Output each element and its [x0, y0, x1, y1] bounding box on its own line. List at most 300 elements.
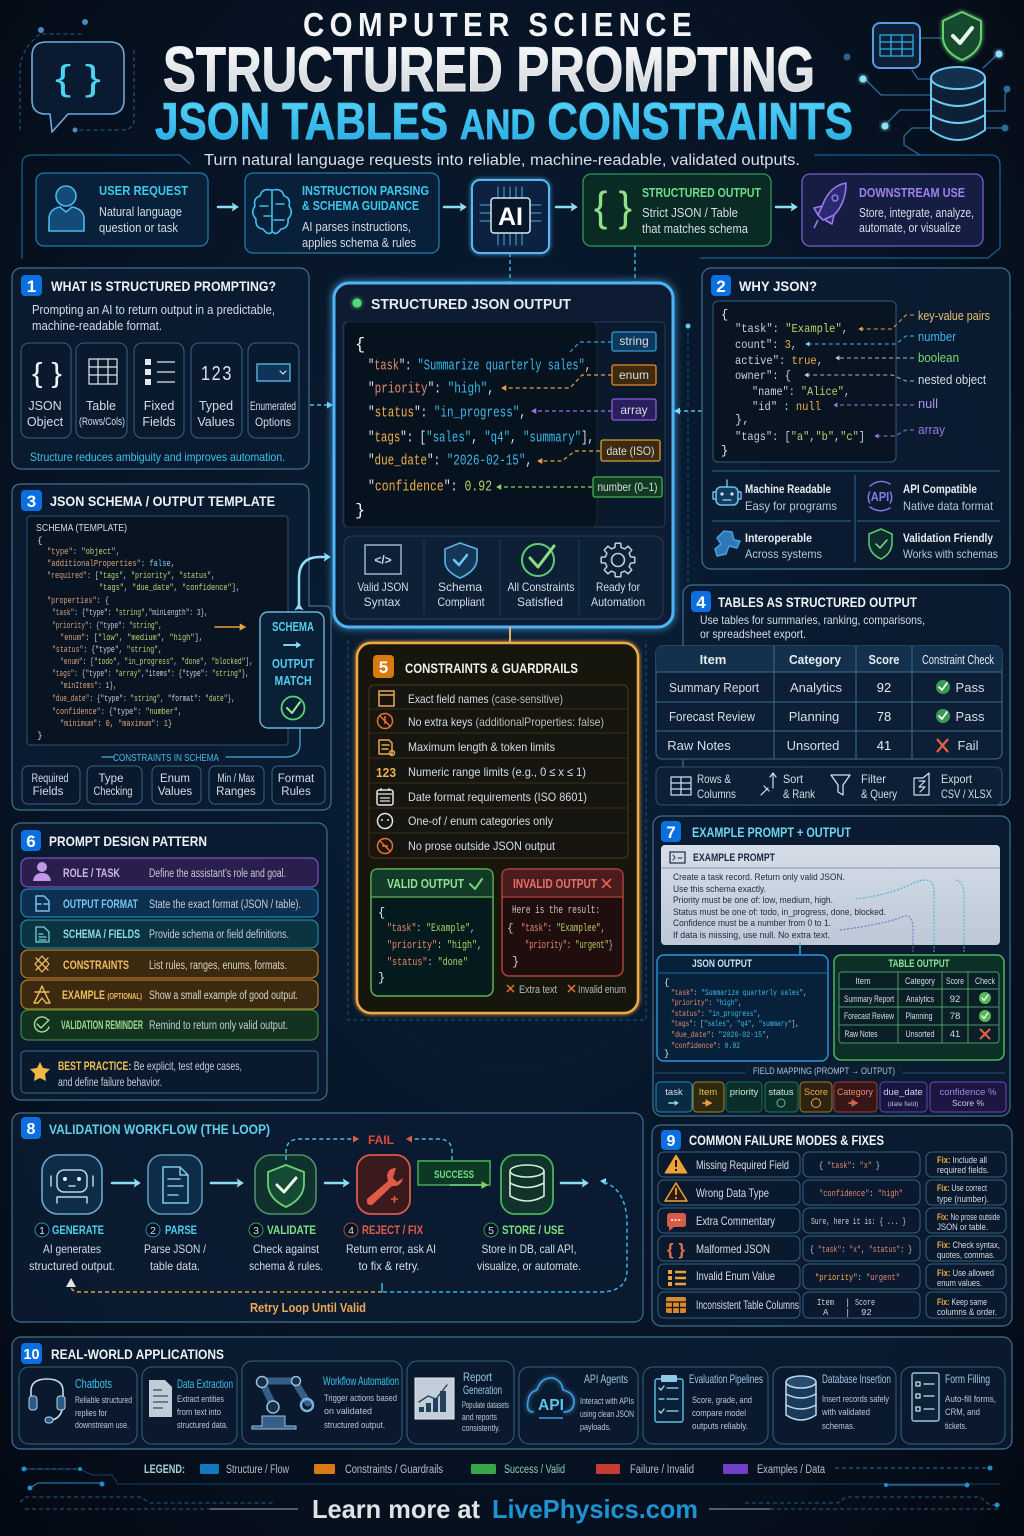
card: chatbots: Reliable structured	[75, 1395, 132, 1406]
example prompt card: Create a task record. Return only valid JSON.	[673, 872, 845, 883]
failure examples: { "task": "x", "status": }	[810, 1245, 912, 1255]
panel 1: what is structured prompting	[12, 268, 309, 469]
table output card: Unsorted	[906, 1029, 934, 1040]
step 4 reject fix: REJECT / FIX	[362, 1223, 423, 1237]
field mapping heading	[655, 1064, 1005, 1078]
connector: central to constraints	[509, 627, 511, 643]
panel 7: example prompt and output: 7	[666, 823, 676, 842]
JSON code: "task": "Summarize quarterly sales",	[368, 358, 591, 374]
footer: learn more	[312, 1494, 698, 1524]
arrow	[218, 206, 236, 208]
step 5 store use: STORE / USE	[502, 1223, 564, 1237]
panel 6: prompt design pattern: PROMPT DESIGN PATTERN	[49, 833, 207, 849]
schema code: "confidence": {"type": "number",	[52, 706, 182, 717]
card: data extraction: from text into	[177, 1407, 221, 1418]
failure examples: "priority": "urgent"	[815, 1273, 900, 1283]
panel 8: validation workflow	[12, 1113, 643, 1322]
panel: downstream use: automate, or visualize	[859, 221, 961, 235]
type tags and leaders: string	[619, 334, 649, 348]
JSON output card	[657, 955, 828, 1061]
panel 2: why JSON: WHY JSON?	[739, 278, 817, 294]
arrow: panel 1 to central	[310, 404, 332, 406]
panel 1: what is structured prompting: WHAT IS STRUCTURED PROMPTING?	[51, 278, 276, 294]
invalid reasons	[507, 984, 626, 996]
schema code: {	[37, 535, 43, 546]
constraint chips: Min / Max	[218, 773, 255, 785]
constraint chips: Ranges	[216, 786, 256, 798]
row backgrounds	[658, 1152, 1006, 1318]
schema output match box: OUTPUT	[272, 657, 314, 671]
row: example optional: EXAMPLE (OPTIONAL)	[62, 988, 142, 1002]
panel: structured output	[583, 174, 771, 246]
schema code: "enum": ["todo", "in_progress", "done", "blocked"],	[60, 656, 253, 667]
panel: instruction parsing: & SCHEMA GUIDANCE	[302, 198, 419, 213]
data table: 78	[877, 709, 891, 724]
invalid output: "task": "Examplee",	[521, 923, 605, 935]
failure fixes: Fix: Use allowed	[937, 1268, 994, 1279]
JSON code: {	[355, 336, 365, 355]
failure examples: 92	[861, 1308, 872, 1318]
panel 6: prompt design pattern	[12, 823, 327, 1100]
arrow	[776, 206, 795, 208]
card: report generation: Report	[463, 1370, 493, 1384]
retry loop: Retry Loop Until Valid	[250, 1300, 366, 1315]
panel 6: prompt design pattern: 6	[26, 832, 36, 851]
panel: central structured JSON output: STRUCTURED JSON OUTPUT	[371, 296, 571, 313]
constraint chips: Type	[99, 773, 123, 785]
type tags and leaders	[497, 332, 662, 497]
code sample: "id" : null	[752, 400, 821, 414]
JSON code: "priority": "high",	[368, 382, 494, 398]
status badges: Compliant	[438, 595, 485, 609]
schema code: }	[37, 730, 43, 741]
card: workflow automation	[242, 1361, 402, 1444]
data table: 41	[877, 738, 891, 753]
flow frame	[22, 155, 1000, 258]
panel: user request: Natural language	[99, 205, 182, 219]
feature: API compatible: (API)	[867, 489, 893, 504]
card: report generation: Generation	[463, 1383, 502, 1397]
card: table: (Rows/Cols)	[79, 416, 125, 428]
step 5 store use: visualize, or automate.	[477, 1259, 581, 1273]
step 1 generate: GENERATE	[52, 1223, 104, 1237]
annotations: nested object	[918, 373, 986, 387]
row: schema fields: Provide schema or field definitions.	[149, 929, 289, 941]
field mapping chips: Category	[837, 1087, 873, 1098]
field mapping chips	[656, 1082, 1006, 1112]
failure names	[696, 1158, 799, 1312]
title block: Turn natural language requests into reliable, machine-readable, validated outputs.	[204, 152, 800, 169]
card: data extraction: Extract entities	[177, 1394, 224, 1405]
feature: validation friendly: Validation Friendly	[903, 531, 993, 545]
panel: downstream use: Store, integrate, analyze,	[859, 206, 974, 220]
card: database insertion: with validated	[821, 1407, 870, 1418]
step 4 reject fix: Return error, ask AI	[346, 1242, 436, 1256]
status badges: Syntax	[364, 595, 400, 609]
schema code: "priority": {"type": "string",	[52, 620, 162, 631]
row: example optional	[21, 980, 318, 1009]
panel: structured output: that matches schema	[642, 222, 748, 236]
panel 4: tables as structured output: TABLES AS STRUCTURED OUTPUT	[718, 594, 917, 610]
panel 5: constraints and guardrails	[357, 643, 638, 1013]
step 5 store use: 5	[488, 1225, 494, 1237]
legend	[144, 1464, 825, 1476]
card: form filling	[901, 1367, 1005, 1444]
status badges: Schema	[438, 580, 482, 594]
data table: Unsorted	[787, 738, 839, 753]
data table: 92	[877, 680, 891, 695]
example prompt card: Confidence must be a number from 0 to 1.	[673, 918, 831, 929]
row: validation reminder: VALIDATION REMINDER	[61, 1018, 143, 1032]
JSON code: "tags": ["sales", "q4", "summary"],	[368, 430, 594, 446]
schema output match box: MATCH	[274, 674, 312, 688]
data table: Score	[868, 652, 900, 667]
example prompt card: Use this schema exactly.	[673, 884, 766, 895]
failure names: Malformed JSON	[696, 1242, 770, 1256]
table output card: TABLE OUTPUT	[888, 958, 950, 970]
step 4 reject fix: to fix & retry.	[358, 1259, 420, 1273]
row: constraints: CONSTRAINTS	[63, 958, 129, 972]
card: evaluation pipelines: Evaluation Pipelines	[689, 1372, 763, 1386]
type tags and leaders: date (ISO)	[606, 444, 654, 458]
schema code: SCHEMA (TEMPLATE)	[36, 522, 127, 534]
panel: instruction parsing: INSTRUCTION PARSING	[302, 183, 429, 198]
card: fixed fields: Fixed	[144, 399, 174, 413]
row: role task: Define the assistant's role and goal.	[149, 868, 286, 880]
failure examples: |	[845, 1308, 850, 1318]
card: table	[76, 343, 127, 438]
failure examples: "confidence": "high"	[819, 1189, 903, 1199]
failure fixes: required fields.	[937, 1165, 989, 1176]
constraint list: No extra keys (additionalProperties: false)	[408, 715, 604, 729]
constraint list: 123	[376, 765, 396, 780]
JSON code: "status": "in_progress",	[368, 406, 526, 422]
table output card: Item	[856, 976, 871, 987]
feature: machine readable	[713, 480, 837, 513]
type tags and leaders: array	[620, 403, 648, 417]
table output card: Summary Report	[844, 994, 894, 1005]
table output card: 78	[950, 1011, 960, 1022]
field mapping chips: (date field)	[888, 1101, 918, 1108]
footer: learn more: LivePhysics.com	[492, 1494, 698, 1524]
card: evaluation pipelines: compare model	[692, 1408, 746, 1419]
step 2 parse: 2	[150, 1225, 156, 1237]
row: constraints	[21, 950, 318, 978]
field mapping chips: due_date	[883, 1087, 923, 1098]
feature: API compatible: API Compatible	[903, 482, 977, 496]
JSON code: "confidence": 0.92	[368, 480, 492, 496]
failure fixes: Fix: Use correct	[937, 1183, 987, 1194]
schema code: "due_date": {"type": "string", "format": "date"},	[52, 693, 235, 704]
constraint chips: Fields	[33, 786, 64, 798]
schema code: "type": "object",	[47, 546, 120, 557]
invalid reasons: Extra text	[519, 984, 557, 996]
data table: Summary Report	[669, 680, 759, 695]
status badges: Automation	[591, 595, 645, 609]
valid output	[371, 869, 493, 996]
table output card: Raw Notes	[844, 1029, 878, 1040]
constraint list	[369, 685, 628, 858]
card: API agents: payloads.	[580, 1422, 611, 1433]
failure examples: A	[823, 1308, 829, 1318]
feature: interoperable: Across systems	[745, 547, 822, 561]
JSON output card: {	[664, 978, 669, 988]
schema code: "task": {"type": "string","minLength": 3},	[52, 607, 208, 618]
JSON code	[355, 336, 594, 521]
example prompt card: If data is missing, use null. No extra text.	[673, 930, 830, 941]
constraint chips	[22, 766, 325, 804]
legend: Constraints / Guardrails	[345, 1464, 443, 1476]
card: data extraction	[142, 1367, 237, 1444]
panel 3: JSON schema: JSON SCHEMA / OUTPUT TEMPLATE	[50, 493, 275, 509]
feature: validation friendly	[869, 529, 998, 561]
card: enumerated options: Enumerated	[250, 399, 296, 413]
card: form filling: CRM, and	[945, 1407, 980, 1418]
feature: API compatible	[867, 481, 994, 513]
table output card: Forecast Review	[844, 1011, 894, 1022]
table capabilities: & Query	[861, 787, 897, 801]
card: report generation	[407, 1361, 514, 1444]
step 1 generate: structured output.	[29, 1259, 115, 1273]
annotations: boolean	[918, 351, 959, 365]
arrow	[211, 1182, 241, 1184]
panel 5: constraints and guardrails: CONSTRAINTS & GUARDRAILS	[405, 660, 578, 676]
icon: table tile, shield and database	[844, 12, 1010, 155]
JSON output card: "status": "in_progress",	[671, 1009, 761, 1019]
JSON code: }	[355, 502, 365, 521]
schema code: "minItems": 1},	[60, 680, 117, 691]
constraint list: Numeric range limits (e.g., 0 ≤ x ≤ 1)	[408, 765, 586, 779]
card: database insertion: Insert records safely	[822, 1394, 889, 1405]
code sample: },	[735, 413, 749, 427]
AI chip	[472, 180, 549, 253]
failure fixes	[937, 1155, 1000, 1318]
data table	[656, 646, 1002, 759]
invalid output: INVALID OUTPUT	[513, 876, 597, 891]
row: output format: OUTPUT FORMAT	[63, 897, 138, 911]
legend: Success / Valid	[504, 1464, 565, 1476]
invalid output: {	[507, 923, 514, 935]
card: chatbots: downstream use.	[75, 1420, 129, 1431]
footer: learn more: Learn more at	[312, 1494, 480, 1524]
panel 9: common failure modes	[652, 1125, 1012, 1326]
legend: Examples / Data	[757, 1464, 825, 1476]
step 3 validate: 3	[253, 1225, 259, 1237]
schema code: "properties": {	[47, 595, 109, 606]
data table: Category	[789, 652, 842, 667]
card: API agents: API Agents	[584, 1372, 628, 1386]
card: JSON object	[21, 343, 71, 438]
step 1 generate	[29, 1155, 115, 1273]
row: output format: State the exact format (JSON / table).	[149, 899, 301, 911]
failure examples: Sure, here it is: { ... }	[811, 1217, 906, 1227]
card: report generation: Populate datasets	[462, 1400, 509, 1410]
panel: central structured JSON output	[334, 283, 673, 627]
step 2 parse	[144, 1155, 207, 1273]
failure fixes: enum values.	[937, 1278, 982, 1289]
data table: Pass	[956, 680, 985, 695]
type tags and leaders: number (0–1)	[598, 480, 658, 494]
retry loop	[66, 1178, 627, 1315]
card: enumerated options: Options	[255, 415, 291, 429]
callout: best practice: and define failure behavior.	[58, 1077, 162, 1089]
panel 3: JSON schema	[12, 484, 331, 810]
feature: API compatible: Native data format	[903, 499, 994, 513]
constraint chips: Checking	[94, 786, 132, 798]
card: typed values: 123	[201, 363, 233, 385]
schema code: "additionalProperties": false,	[47, 558, 175, 569]
panel 8: validation workflow: VALIDATION WORKFLOW (THE LOOP)	[49, 1122, 270, 1137]
panel 1: what is structured prompting: machine-readable format.	[32, 319, 162, 333]
legend: Failure / Invalid	[630, 1464, 694, 1476]
title block: COMPUTER SCIENCE	[303, 6, 697, 43]
constraint chips: Format	[278, 773, 315, 785]
failure names: Invalid Enum Value	[696, 1269, 775, 1283]
title block	[155, 6, 853, 169]
data table: Forecast Review	[669, 709, 756, 724]
failure fixes: Fix: Keep same	[937, 1297, 987, 1308]
field mapping chips: Score	[804, 1087, 828, 1098]
field mapping chips: confidence %	[939, 1087, 997, 1098]
data table: Item	[700, 652, 726, 667]
JSON output card: "priority": "high",	[671, 998, 742, 1008]
status badges: </>	[374, 553, 392, 567]
failure examples: Item	[817, 1298, 834, 1308]
panel 10: real-world applications: REAL-WORLD APPLICATIONS	[51, 1347, 224, 1362]
JSON output card: }	[664, 1049, 669, 1059]
data table: Pass	[956, 709, 985, 724]
status badges: Valid JSON	[358, 580, 408, 594]
field mapping chips: Item	[699, 1087, 717, 1098]
AI chip: AI	[498, 203, 523, 231]
data table: Fail	[958, 738, 979, 753]
annotations	[805, 309, 990, 437]
code sample: owner": {	[735, 369, 791, 383]
row: validation reminder: Remind to return only valid output.	[149, 1020, 288, 1032]
step 3 validate	[249, 1155, 323, 1273]
field mapping chips: task	[665, 1087, 683, 1098]
panel: instruction parsing: AI parses instructions,	[302, 220, 411, 234]
panel: user request	[36, 173, 208, 246]
annotations: number	[918, 330, 956, 344]
callout: best practice: BEST PRACTICE: Be explicit, test edge cases,	[58, 1059, 242, 1073]
schema code: "status": {"type", "string",	[52, 644, 162, 655]
constraint chips: Rules	[281, 786, 311, 798]
arrow	[556, 206, 575, 208]
panel 3: JSON schema: CONSTRAINTS IN SCHEMA	[113, 752, 219, 764]
card: report generation: consistently.	[462, 1423, 500, 1433]
arrow: panel 2 to central	[675, 410, 702, 412]
panel 4: tables as structured output: or spreadsheet export.	[700, 627, 806, 641]
panel: structured output: { }	[594, 183, 632, 230]
table capabilities: CSV / XLSX	[941, 787, 992, 801]
success and fail routing: FAIL	[368, 1133, 394, 1147]
step 2 parse: Parse JSON /	[144, 1242, 207, 1256]
card: JSON object: { }	[32, 357, 62, 388]
failure fixes: Fix: Check syntax,	[937, 1240, 1000, 1251]
panel 8: validation workflow: 8	[27, 1121, 36, 1138]
table capabilities	[656, 767, 1002, 805]
JSON output card: "confidence": 0.92	[671, 1041, 740, 1051]
annotations: key-value pairs	[918, 309, 990, 323]
table capabilities: Export	[941, 772, 973, 786]
card: typed values: Values	[197, 415, 235, 429]
callout: best practice	[21, 1051, 318, 1093]
table output card: Planning	[906, 1011, 932, 1022]
panel: downstream use: DOWNSTREAM USE	[859, 185, 965, 200]
card: form filling: Auto-fill forms,	[945, 1394, 996, 1405]
panel 1: what is structured prompting: Structure reduces ambiguity and improves automation.	[30, 450, 285, 464]
constraint chips: Required	[32, 773, 68, 785]
panel 4: tables as structured output: 4	[696, 593, 706, 612]
table output card: 41	[950, 1029, 960, 1040]
code sample: }	[721, 444, 728, 458]
table output card: Category	[905, 976, 935, 987]
schema code: "required": ["tags", "priority", "status",	[47, 570, 215, 581]
arrow	[112, 1182, 138, 1184]
step 4 reject fix: 4	[348, 1225, 354, 1237]
example prompt card	[661, 845, 1000, 952]
panel 7: example prompt and output: EXAMPLE PROMPT + OUTPUT	[692, 825, 852, 840]
legend: Structure / Flow	[226, 1464, 290, 1476]
row: example optional: Show a small example of good output.	[149, 990, 298, 1002]
title block: STRUCTURED PROMPTING	[163, 35, 815, 105]
code sample: "tags": ["a","b","c"]	[735, 430, 865, 444]
failure names: Missing Required Field	[696, 1158, 789, 1172]
panel 10: real-world applications: 10	[23, 1347, 40, 1363]
JSON output card: "tags": ["sales", "q4", "summary"],	[671, 1019, 799, 1029]
failure examples: Score	[855, 1298, 875, 1308]
data table: Analytics	[790, 680, 843, 695]
panel 7: example prompt and output	[653, 816, 1010, 1116]
card: API agents: Interact with APIs	[580, 1396, 634, 1407]
JSON output card: "task": "Summarize quarterly sales",	[671, 988, 807, 998]
panel 9: common failure modes: 9	[667, 1133, 676, 1150]
JSON code: "due_date": "2026-02-15",	[368, 454, 532, 470]
row: constraints: List rules, ranges, enums, formats.	[149, 960, 287, 972]
data table: Raw Notes	[667, 738, 731, 753]
card: fixed fields: Fields	[142, 415, 176, 429]
table output card: 92	[950, 994, 960, 1005]
icon: chat bubble with braces	[20, 19, 134, 132]
step 3 validate: schema & rules.	[249, 1259, 323, 1273]
failure examples: |	[845, 1298, 850, 1308]
panel 10: real-world applications	[12, 1337, 1012, 1449]
JSON output card: JSON OUTPUT	[692, 958, 752, 970]
table output card	[834, 955, 1004, 1060]
example prompt card: EXAMPLE PROMPT	[693, 852, 775, 864]
panel 2: why JSON	[702, 268, 1010, 569]
panel 1: what is structured prompting: 1	[27, 277, 36, 296]
card: database insertion: Database Insertion	[822, 1372, 891, 1386]
step 2 parse: PARSE	[165, 1223, 197, 1237]
card: evaluation pipelines: Score, grade, and	[692, 1395, 752, 1406]
schema output match box	[260, 612, 324, 728]
card: API agents: using clean JSON	[580, 1409, 634, 1420]
legend: LEGEND:	[144, 1464, 185, 1476]
constraint list: Exact field names (case-sensitive)	[408, 692, 563, 706]
curved arrow to central panel	[299, 557, 328, 606]
card: fixed fields	[134, 343, 184, 438]
panel 2: why JSON: 2	[716, 277, 726, 296]
arrow	[444, 206, 464, 208]
card: typed values: Typed	[199, 399, 233, 413]
field mapping heading: FIELD MAPPING (PROMPT → OUTPUT)	[753, 1066, 895, 1077]
failure names: Inconsistent Table Columns	[696, 1298, 799, 1312]
card: table: Table	[86, 399, 116, 413]
valid output: VALID OUTPUT	[387, 876, 464, 891]
failure fixes: quotes, commas.	[937, 1250, 995, 1261]
